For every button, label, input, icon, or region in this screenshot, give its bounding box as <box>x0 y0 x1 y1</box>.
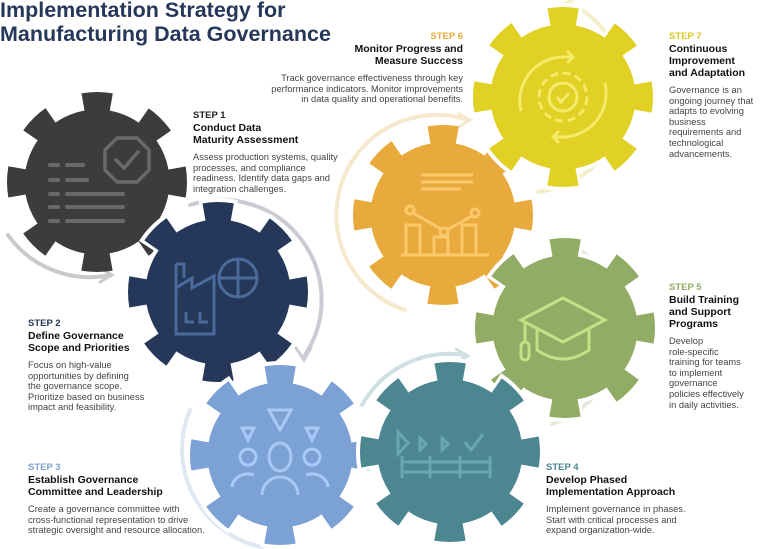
text: step 3: Committee and Leadership <box>28 486 163 498</box>
text: step 1: Assess production systems, quality <box>193 152 338 162</box>
text: step 4: Develop Phased <box>546 474 627 486</box>
text: step 2 <box>28 318 144 412</box>
icon: checklist <box>50 138 149 221</box>
icon: graduation cap <box>521 298 605 360</box>
text: step 5: Build Training <box>669 294 739 306</box>
title <box>0 0 331 46</box>
text: step 6: STEP 6 <box>430 31 463 42</box>
text: step 5: policies effectively <box>669 389 744 399</box>
text: step 7: requirements and <box>669 127 741 137</box>
text: step 5: role-specific <box>669 347 719 357</box>
text: step 5: in daily activities. <box>669 400 739 410</box>
text: step 2: Focus on high-value <box>28 360 112 370</box>
title: Manufacturing Data Governance <box>0 22 331 46</box>
arrow: gear3 to gear4 <box>182 410 363 547</box>
icon: factory <box>176 259 257 334</box>
icon: committee <box>232 410 328 495</box>
text: step 1 <box>193 110 338 194</box>
gear 6 <box>363 135 523 295</box>
text: step 6: in data quality and operational benefits. <box>301 94 463 104</box>
text: step 3: Create a governance committee with <box>28 504 179 514</box>
gear 7 <box>483 17 643 177</box>
gear 5 <box>485 248 645 408</box>
text: step 4: Implementation Approach <box>546 486 675 498</box>
text: step 6: Measure Success <box>375 55 463 67</box>
text: step 4 <box>546 462 686 535</box>
text: step 7: Governance is an <box>669 85 742 95</box>
arrow: gear5 to gear6 <box>552 238 619 424</box>
text: step 2: the governance scope. <box>28 381 122 391</box>
icon: cycle gear <box>520 51 606 143</box>
arrow: gear1 to gear2 <box>8 235 112 282</box>
text: step 2: STEP 2 <box>28 318 61 329</box>
gear 4 <box>370 372 530 532</box>
text: step 1: processes, and compliance <box>193 163 306 173</box>
text: step 3: Establish Governance <box>28 474 138 486</box>
text: step 3: cross-functional representation to drive <box>28 515 188 525</box>
text: step 4: Implement governance in phases. <box>546 504 686 514</box>
arrow: gear7 loop <box>538 0 626 192</box>
text: step 7 <box>669 31 754 159</box>
text: step 5: Programs <box>669 318 718 330</box>
gear 2 <box>138 212 298 372</box>
text: step 5: to implement <box>669 368 722 378</box>
text: step 4: STEP 4 <box>546 462 579 473</box>
text: step 1: STEP 1 <box>193 110 226 121</box>
text: step 5: training for teams <box>669 357 741 367</box>
text: step 5 <box>669 282 744 410</box>
text: step 2: impact and feasibility. <box>28 402 116 412</box>
text: step 6: performance indicators. Monitor improvements <box>271 84 463 94</box>
text: step 6 <box>271 31 463 104</box>
text: step 7: Continuous <box>669 43 727 55</box>
text: step 7: Improvement <box>669 55 735 67</box>
icon: phased timeline <box>398 432 492 478</box>
text: step 7: and Adaptation <box>669 67 745 79</box>
icon: bar chart <box>401 175 489 255</box>
text: step 1: Conduct Data <box>193 122 261 134</box>
text: step 1: integration challenges. <box>193 184 286 194</box>
text: step 3: strategic oversight and resource allocation. <box>28 525 205 535</box>
arrow: gear6 to gear7 <box>336 114 470 310</box>
text: step 1: readiness. Identify data gaps and <box>193 173 330 183</box>
text: step 3: STEP 3 <box>28 462 61 473</box>
text: step 7: adapts to evolving <box>669 106 744 116</box>
text: step 2: Prioritize based on business <box>28 392 144 402</box>
text: step 5: Develop <box>669 336 703 346</box>
text: step 4: expand organization-wide. <box>546 525 655 535</box>
gear 3 <box>200 375 360 535</box>
text: step 1: Maturity Assessment <box>193 134 298 146</box>
text: step 7: STEP 7 <box>669 31 702 42</box>
text: step 3 <box>28 462 205 535</box>
text: step 7: business <box>669 117 706 127</box>
text: step 4: Start with critical processes and <box>546 515 677 525</box>
text: step 5: governance <box>669 378 718 388</box>
arrow: gear4 to gear5 <box>362 349 468 405</box>
text: step 2: Define Governance <box>28 330 124 342</box>
text: step 2: Scope and Priorities <box>28 342 130 354</box>
gear 1 <box>17 102 177 262</box>
text: step 2: opportunities by defining <box>28 371 129 381</box>
text: step 7: advancements. <box>669 149 732 159</box>
text: step 7: technological <box>669 138 723 148</box>
text: step 7: ongoing journey that <box>669 96 753 106</box>
text: step 5: STEP 5 <box>669 282 702 293</box>
text: step 5: and Support <box>669 306 731 318</box>
text: step 6: Monitor Progress and <box>354 43 463 55</box>
text: step 6: Track governance effectiveness through key <box>281 73 463 83</box>
arrow: gear2 to gear3 <box>190 200 322 360</box>
